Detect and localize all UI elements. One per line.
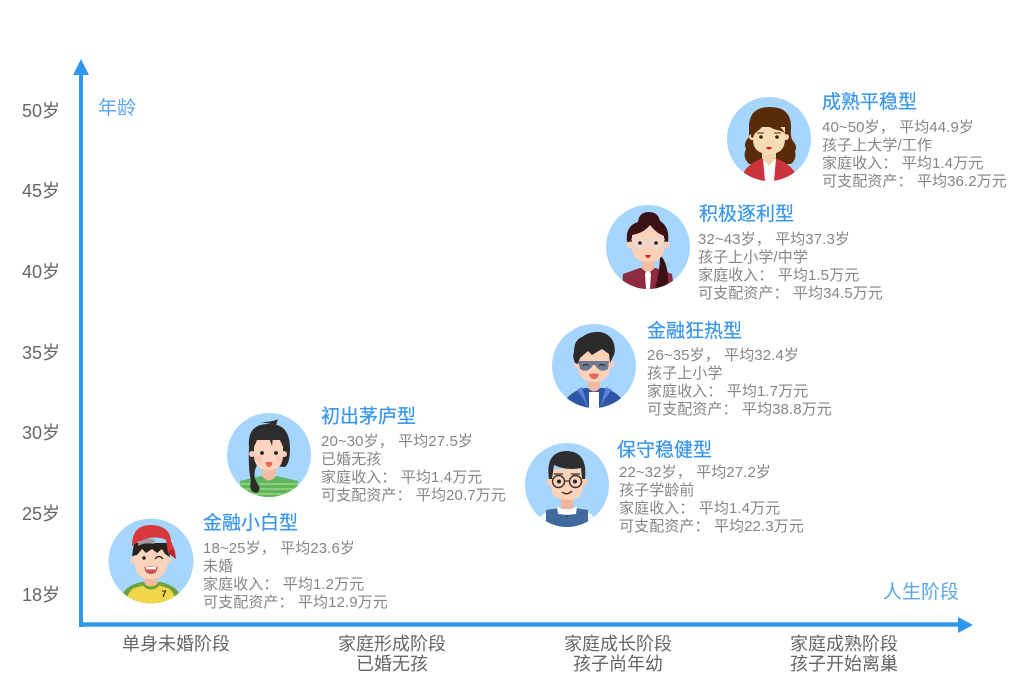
persona name: 金融小白型 (203, 513, 298, 534)
persona details: 孩子上大学/工作 (822, 137, 932, 154)
stage label: single: 单身未婚阶段 (122, 634, 230, 654)
persona: 初出茅庐型 (227, 406, 506, 504)
persona details: 家庭收入： 平均1.4万元 (321, 469, 482, 486)
persona name: 成熟平稳型 (822, 92, 917, 113)
persona details: 可支配资产： 平均22.3万元 (619, 518, 804, 535)
persona details: 32~43岁， 平均37.3岁 (698, 231, 850, 248)
persona details: 可支配资产： 平均34.5万元 (698, 285, 883, 302)
persona details: 家庭收入： 平均1.4万元 (619, 500, 780, 517)
age tick 25: 25岁 (22, 504, 60, 524)
age tick 35: 35岁 (22, 343, 60, 363)
persona details: 已婚无孩 (321, 451, 381, 468)
avatar: girl with long black hair (227, 413, 311, 497)
persona name: 金融狂热型 (647, 321, 742, 342)
persona details (647, 347, 832, 418)
stage label: family growing (564, 634, 672, 674)
persona details: 可支配资产： 平均38.8万元 (647, 401, 832, 418)
y axis arrow (73, 59, 89, 627)
age tick 50: 50岁 (22, 101, 60, 121)
persona details: 家庭收入： 平均1.4万元 (822, 155, 983, 172)
avatar: woman with wavy brown hair (727, 97, 811, 181)
persona details: 可支配资产： 平均12.9万元 (203, 594, 388, 611)
persona details: 孩子学龄前 (619, 482, 695, 499)
persona name: 保守稳健型 (617, 440, 712, 461)
stage label: family mature: 家庭成熟阶段 (790, 634, 898, 654)
stage label: family mature: 孩子开始离巢 (790, 654, 898, 674)
persona details: 26~35岁， 平均32.4岁 (647, 347, 799, 364)
persona name: 初出茅庐型 (321, 406, 416, 428)
persona details: 可支配资产： 平均36.2万元 (822, 173, 1007, 190)
y axis title: 年龄 (98, 98, 136, 119)
persona details: 22~32岁， 平均27.2岁 (619, 464, 771, 481)
avatar: boy with red cap: 7 (161, 589, 167, 599)
age tick 30: 30岁 (22, 423, 60, 443)
stage label: family forming (338, 634, 446, 674)
persona details (822, 119, 1007, 190)
age tick 18: 18岁 (22, 585, 60, 605)
persona details (698, 231, 883, 302)
persona details: 家庭收入： 平均1.7万元 (647, 383, 808, 400)
age tick 45: 45岁 (22, 181, 60, 201)
x axis arrow (83, 617, 973, 633)
persona: 金融小白型 (108, 512, 388, 611)
stage label: family forming: 已婚无孩 (356, 654, 428, 674)
persona details: 孩子上小学/中学 (698, 249, 808, 266)
persona: 成熟平稳型 (727, 92, 1007, 190)
persona details (321, 433, 506, 504)
avatar: man with sunglasses and blue jacket (552, 324, 636, 408)
stage label: family mature (790, 634, 898, 674)
persona details: 20~30岁， 平均27.5岁 (321, 433, 473, 450)
persona: 金融狂热型 (552, 320, 832, 418)
x axis title: 人生阶段 (883, 582, 959, 603)
stage label: family forming: 家庭形成阶段 (338, 634, 446, 654)
persona details: 家庭收入： 平均1.5万元 (698, 267, 859, 284)
persona: 积极逐利型 (606, 204, 883, 302)
persona details: 孩子上小学 (647, 365, 723, 382)
persona details: 可支配资产： 平均20.7万元 (321, 487, 506, 504)
persona details: 40~50岁， 平均44.9岁 (822, 119, 974, 136)
avatar: boy with red cap (108, 518, 194, 604)
avatar: man with round glasses and vest (525, 443, 609, 527)
stage label: family growing: 家庭成长阶段 (564, 634, 672, 654)
persona details (203, 540, 388, 611)
persona details: 18~25岁， 平均23.6岁 (203, 540, 355, 557)
avatar: woman with ponytail and glasses (606, 205, 690, 289)
persona details (619, 464, 804, 535)
persona: 保守稳健型 (525, 440, 804, 535)
persona name: 积极逐利型 (699, 204, 794, 225)
persona details: 家庭收入： 平均1.2万元 (203, 576, 364, 593)
persona details: 未婚 (203, 558, 233, 575)
stage label: family growing: 孩子尚年幼 (573, 654, 663, 674)
age tick 40: 40岁 (22, 262, 60, 282)
